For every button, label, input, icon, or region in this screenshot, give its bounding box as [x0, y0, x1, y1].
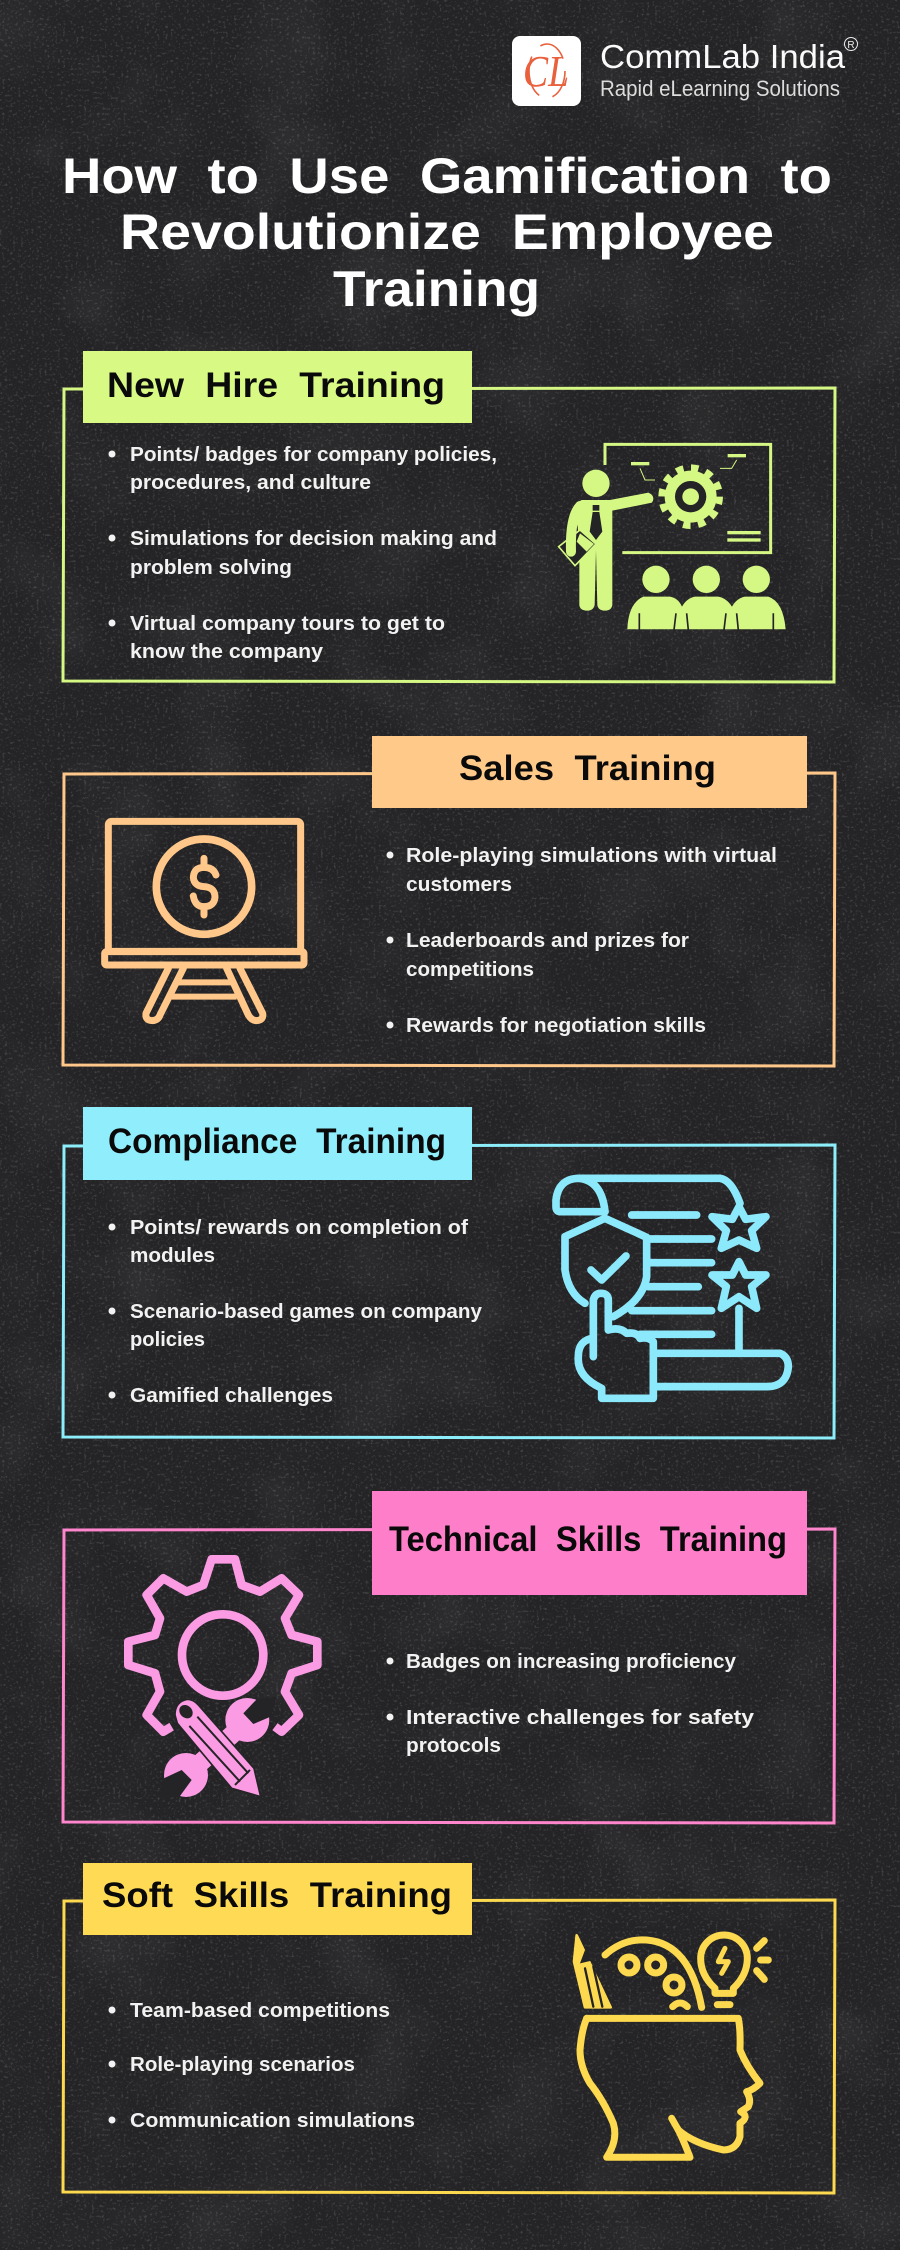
panel: Sales Training	[63, 736, 835, 1066]
bullet list	[108, 443, 497, 663]
logo tagline: Rapid eLearning Solutions	[600, 76, 840, 101]
icon: policy scroll with shield, hand and stars	[556, 1178, 788, 1398]
registered mark	[844, 38, 858, 51]
panel frame	[63, 1145, 835, 1438]
bullet list: Role-playing simulations with virtual	[406, 844, 777, 867]
panel: Compliance Training	[63, 1107, 835, 1438]
icon: presenter with gear	[559, 444, 786, 630]
bullet list	[108, 1216, 483, 1407]
panel frame	[63, 1900, 835, 2193]
registered mark: R	[847, 40, 855, 51]
tab: Technical Skills Training: Technical Skills Training	[389, 1520, 787, 1559]
title: Revolutionize Employee	[120, 204, 774, 260]
bullet list: Scenario-based games on company	[130, 1300, 483, 1323]
logo tile	[512, 36, 581, 106]
logo tile: CL	[523, 47, 569, 96]
bullet list: problem solving	[130, 556, 292, 579]
title	[62, 148, 832, 317]
bullet list	[108, 1999, 415, 2132]
panel: New Hire Training	[63, 351, 835, 682]
bullet list	[386, 844, 777, 1037]
bullet list: Interactive challenges for safety	[406, 1706, 755, 1729]
tab: New Hire Training	[83, 351, 472, 423]
tab: Technical Skills Training	[372, 1491, 807, 1595]
tab: Soft Skills Training: Soft Skills Training	[102, 1876, 452, 1915]
bullet list: competitions	[406, 958, 534, 981]
bullet list: know the company	[130, 640, 324, 663]
bullet list: Badges on increasing proficiency	[406, 1650, 737, 1673]
bullet list: Leaderboards and prizes for	[406, 929, 689, 952]
tab: Compliance Training: Compliance Training	[108, 1122, 446, 1161]
title: Training	[333, 261, 540, 317]
panel: Soft Skills Training	[63, 1863, 835, 2193]
tab: Compliance Training	[83, 1107, 472, 1180]
bullet list: procedures, and culture	[130, 471, 371, 494]
logo name: CommLab India	[600, 38, 846, 75]
panel frame	[63, 773, 835, 1066]
bullet list: customers	[406, 873, 512, 896]
bullet list: Points/ rewards on completion of	[130, 1216, 468, 1239]
icon: gear with pencil and wrench	[128, 1559, 317, 1800]
bullet list	[386, 1650, 755, 1757]
panel: Technical Skills Training	[63, 1491, 835, 1823]
panel frame	[63, 388, 835, 682]
logo: CommLab India	[512, 36, 858, 106]
tab: Sales Training: Sales Training	[459, 749, 716, 788]
bullet list: Virtual company tours to get to	[130, 612, 445, 635]
bullet list: Gamified challenges	[130, 1384, 333, 1407]
bullet list: Rewards for negotiation skills	[406, 1014, 706, 1037]
tab: Sales Training	[372, 736, 807, 808]
bullet list: Team-based competitions	[130, 1999, 390, 2022]
bullet list: protocols	[406, 1734, 501, 1757]
icon: dollar on easel	[105, 821, 304, 1021]
title: How to Use Gamification to	[62, 148, 832, 204]
icon: head with pencil, ideas and bulb	[574, 1935, 768, 2157]
bullet list: Role-playing scenarios	[130, 2053, 355, 2076]
tab: New Hire Training: New Hire Training	[107, 366, 445, 405]
bullet list: Simulations for decision making and	[130, 527, 497, 550]
bullet list: policies	[130, 1328, 205, 1351]
panel frame	[63, 1529, 835, 1823]
bullet list: Communication simulations	[130, 2109, 415, 2132]
bullet list: modules	[130, 1244, 215, 1267]
bullet list: Points/ badges for company policies,	[130, 443, 497, 466]
tab: Soft Skills Training	[83, 1863, 472, 1935]
